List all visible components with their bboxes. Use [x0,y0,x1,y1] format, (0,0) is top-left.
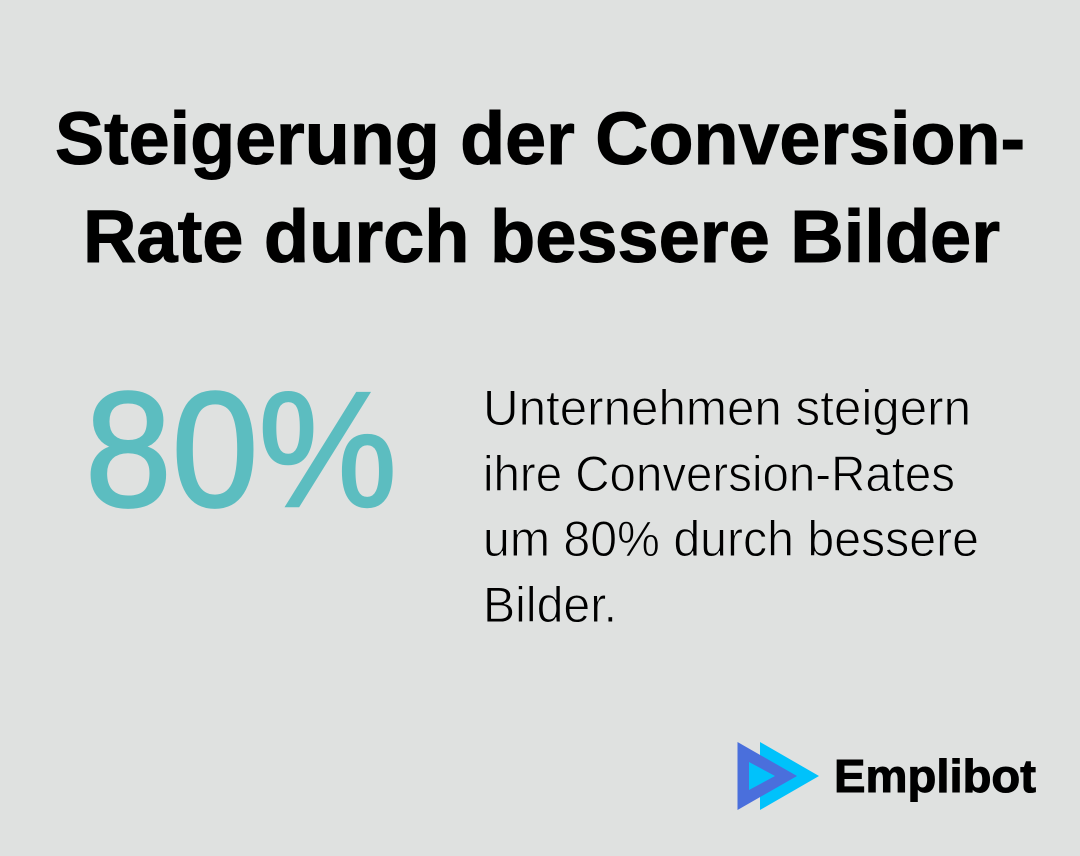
description text: Bilder. [483,577,617,633]
description text [483,380,979,633]
description text: um 80% durch bessere [483,511,979,567]
title: Steigerung der Conversion- [55,97,1025,180]
title: Rate durch bessere Bilder [83,195,1000,278]
description text: ihre Conversion-Rates [483,446,955,502]
logo: Emplibot [738,742,1036,810]
icon: play triangles [738,742,819,810]
big stat: 80%: 80% [85,358,397,541]
title [55,97,1025,278]
logo wordmark: Emplibot [834,750,1036,802]
description text: Unternehmen steigern [483,380,971,436]
